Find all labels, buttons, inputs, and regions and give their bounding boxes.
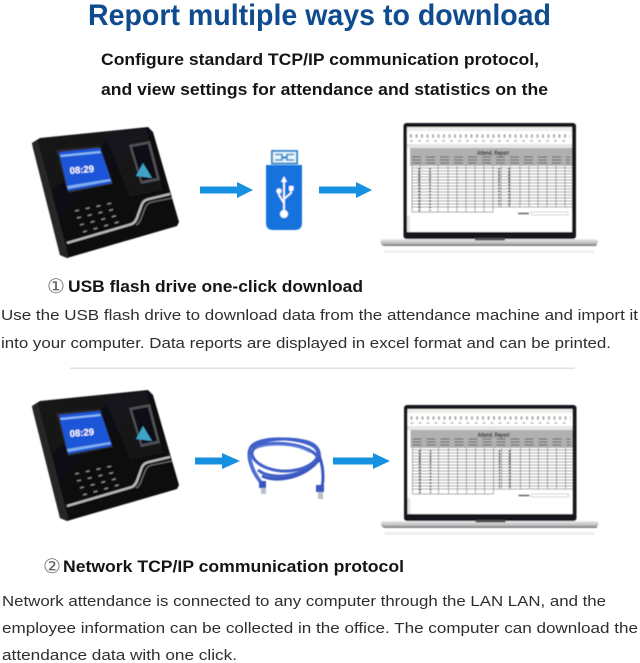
icon: attendance machine, USB row: 08:29 [69,164,94,177]
icon: network cable [249,439,324,499]
silver swoosh [67,194,170,243]
screen [56,409,113,456]
network description: employee information can be collected in the office. The computer can download the [2,620,638,637]
icon: attendance machine, network row [32,390,179,521]
arrow: machine to USB [200,182,253,198]
icon: attendance machine, USB row [32,127,179,258]
intro text: and view settings for attendance and statistics on the [101,81,548,99]
network description: Network attendance is connected to any computer through the LAN LAN, and the [2,593,606,610]
silver swoosh [67,457,170,506]
icon: USB flash drive [266,151,302,230]
section heading: USB: USB flash drive one-click download [68,278,363,296]
section heading: network: Network TCP/IP communication protocol [63,558,404,576]
icon: laptop with attendance report, network row: Attend. Report [478,432,510,439]
arrow: USB to laptop [319,182,372,198]
section heading: USB: ① [47,276,65,298]
screen [56,146,113,193]
keypad [75,465,122,495]
fingerprint sensor [129,141,160,184]
icon: laptop with attendance report, USB row [380,123,598,253]
icon: laptop with attendance report, USB row: Attend. Report [477,150,509,157]
USB description [1,307,639,352]
fingerprint sensor [129,404,160,447]
icon: laptop with attendance report, network row [381,405,598,535]
intro text [101,51,548,99]
arrow: machine to cable [195,453,240,469]
keypad [75,202,122,232]
USB description: into your computer. Data reports are displayed in excel format and can be printed. [1,335,611,352]
arrow: cable to laptop [333,453,390,469]
section heading: network: ② [43,556,61,578]
network description [2,593,638,663]
icon: attendance machine, network row: 08:29 [69,427,94,440]
intro text: Configure standard TCP/IP communication protocol, [101,51,539,69]
USB description: Use the USB flash drive to download data from the attendance machine and import it [1,307,639,324]
